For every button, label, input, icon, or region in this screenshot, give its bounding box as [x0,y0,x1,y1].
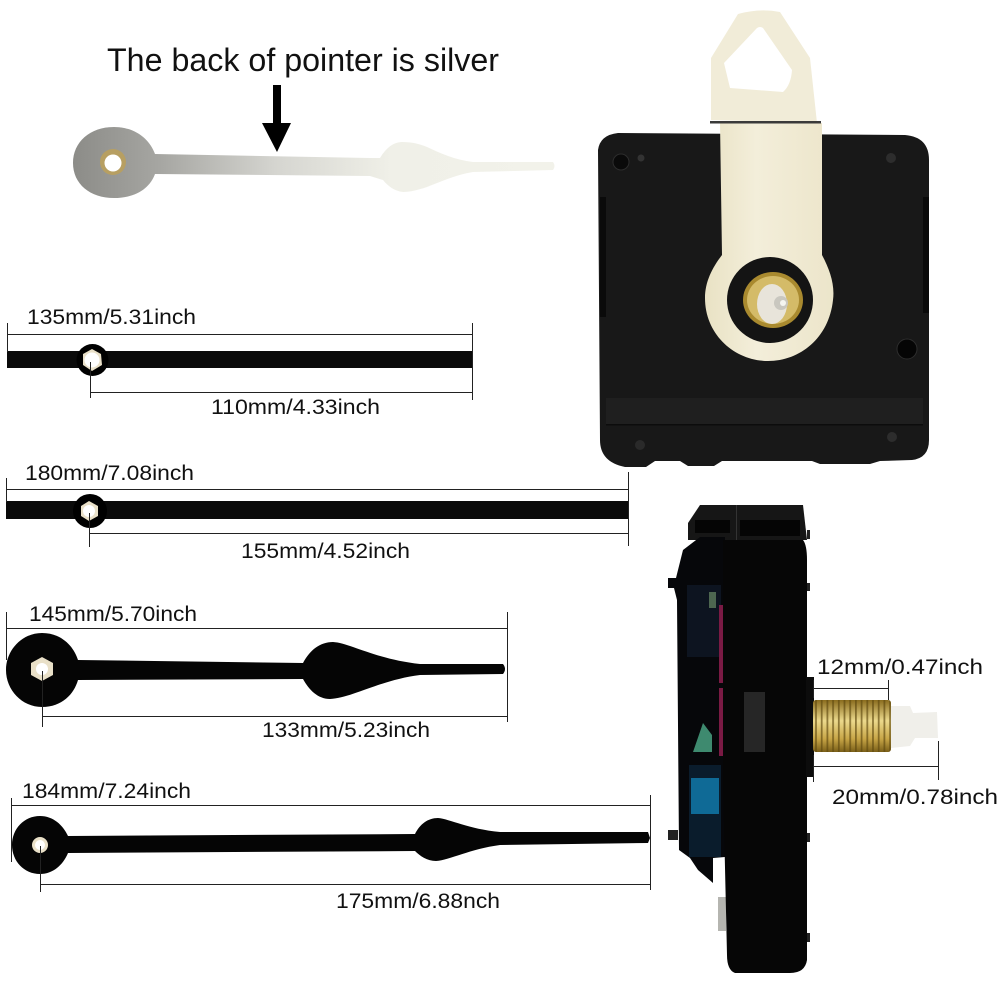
label: 175mm: 175mm/6.88nch [336,889,500,913]
dimensions: shaft [813,680,938,782]
clock movement: back view [598,10,929,467]
dimensions: hand 4 [12,795,650,892]
hand 3: 145mm spade [6,633,505,707]
mount collar [806,677,814,777]
label: 180mm: 180mm/7.08inch [25,461,194,485]
hand 4: 184mm spade [12,816,650,874]
silver hand [73,127,554,198]
dimensions: hand 3 [6,612,508,727]
title: back of pointer note: The back of pointer is silver [107,42,499,78]
arrow: pointing to silver hand [262,85,291,152]
clock movement: side view [668,505,938,973]
hand 1: 135mm straight [7,344,472,376]
hanger bracket [711,10,817,123]
dimensions: hand 1 [7,323,472,400]
label: 184mm: 184mm/7.24inch [22,779,191,803]
label: 135mm: 135mm/5.31inch [27,305,196,329]
dimensions: hand 2 [6,472,628,547]
top clip [688,505,807,540]
label: 12mm: 12mm/0.47inch [817,655,983,679]
label: 133mm: 133mm/5.23inch [262,718,430,742]
hand 2: 180mm straight [6,494,629,528]
bracket strap [705,122,833,361]
centre shaft [727,257,813,343]
label: 20mm: 20mm/0.78inch [832,785,998,809]
threaded brass shaft [813,700,891,752]
label: 110mm: 110mm/4.33inch [211,395,380,419]
label: 145mm: 145mm/5.70inch [29,602,197,626]
label: 155mm: 155mm/4.52inch [241,539,410,563]
main black casing [723,540,807,973]
rear transparent section [668,537,725,883]
white shaft tip [891,706,938,748]
movement body [598,133,929,467]
